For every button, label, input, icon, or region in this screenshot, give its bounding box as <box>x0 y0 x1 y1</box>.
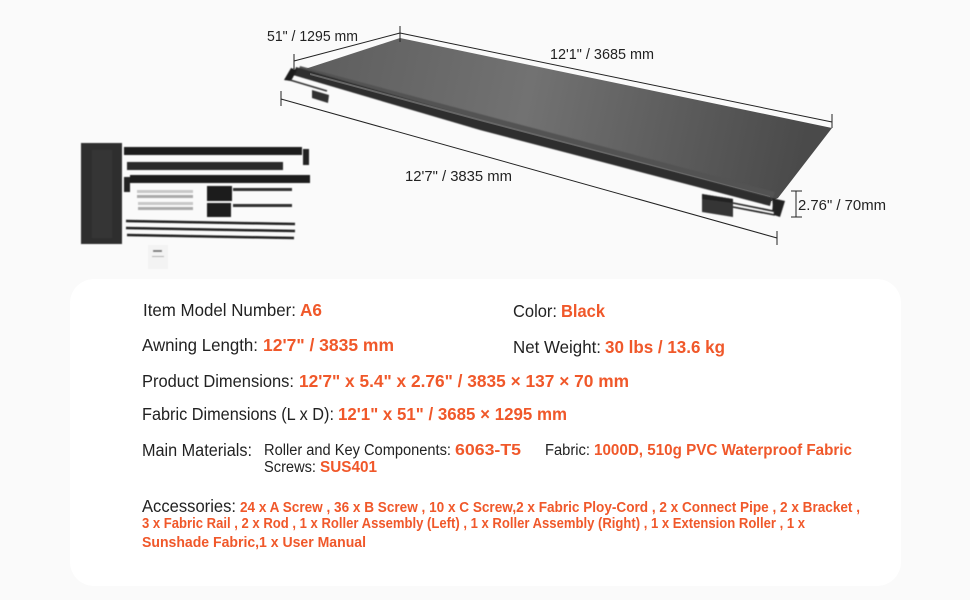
spec: net weight <box>513 337 725 357</box>
spec: accessories: 24 x A Screw , 36 x B Screw , 10 x C Screw,2 x Fabric Ploy-Cord , 2 x Connect Pipe , 2 x Bracket , <box>240 500 860 516</box>
awning product image <box>284 38 832 217</box>
rolled fabric <box>81 143 122 244</box>
spec: net weight: Net Weight: <box>513 337 601 357</box>
spec: main materials: 6063-T5 <box>455 442 521 459</box>
spec: main materials: 1000D, 510g PVC Waterproof Fabric <box>594 442 852 459</box>
spec: color: Color: <box>513 301 557 321</box>
dimension: fabric length <box>400 33 832 128</box>
rollers <box>124 147 302 155</box>
spec: accessories: Accessories: <box>142 496 236 516</box>
fabric sheet <box>300 38 832 203</box>
brackets <box>207 186 232 201</box>
spec: color: Black <box>561 301 605 321</box>
spec: main materials: Fabric: <box>545 442 590 459</box>
spec: accessories <box>142 496 860 551</box>
spec: fabric dimensions: 12'1" x 51" / 3685 × 1295 mm <box>338 404 567 424</box>
dimension: height <box>791 191 886 217</box>
specification panel <box>70 279 901 586</box>
spec: item model number: Item Model Number: <box>143 300 296 320</box>
spec: product dimensions: Product Dimensions: <box>142 371 294 391</box>
right end bracket <box>702 194 785 217</box>
fabric rails <box>137 190 193 193</box>
spec: awning length: Awning Length: <box>142 335 258 355</box>
spec: awning length <box>142 335 394 355</box>
roller tube <box>293 67 772 206</box>
spec: item model number: A6 <box>300 300 322 320</box>
spec: main materials <box>142 440 852 476</box>
spec: accessories: 3 x Fabric Rail , 2 x Rod , 1 x Roller Assembly (Left) , 1 x Roller Assembly (Right) , 1 x Extension Roller , 1 x <box>142 516 805 532</box>
left end bracket <box>284 68 329 103</box>
spec: main materials: SUS401 <box>320 459 377 476</box>
spec: color <box>513 301 605 321</box>
spec: main materials: Main Materials: <box>142 440 252 460</box>
spec: accessories: Sunshade Fabric,1 x User Manual <box>142 535 366 551</box>
dimension: fabric length: 12'1" / 3685 mm <box>550 47 654 63</box>
spec: product dimensions: 12'7" x 5.4" x 2.76" / 3835 × 137 × 70 mm <box>299 371 629 391</box>
roller highlight <box>310 73 770 197</box>
spec: awning length: 12'7" / 3835 mm <box>263 335 394 355</box>
long poles <box>126 221 295 224</box>
spec: net weight: 30 lbs / 13.6 kg <box>605 337 725 357</box>
spec: fabric dimensions <box>142 404 567 424</box>
spec: fabric dimensions: Fabric Dimensions (L x D): <box>142 404 334 424</box>
user manual <box>148 245 168 269</box>
dimension: fabric width <box>267 26 400 69</box>
dimension: awning length: 12'7" / 3835 mm <box>405 169 512 185</box>
rods <box>233 188 292 191</box>
fabric fold shading <box>298 66 775 200</box>
spec: main materials: Screws: <box>264 459 316 476</box>
parts kit image <box>81 143 310 269</box>
spec: main materials: Roller and Key Components: <box>264 442 451 459</box>
dimension: awning length <box>281 91 777 245</box>
spec: product dimensions <box>142 371 629 391</box>
dimension: height: 2.76" / 70mm <box>798 198 886 214</box>
dimension: fabric width: 51" / 1295 mm <box>267 29 358 45</box>
